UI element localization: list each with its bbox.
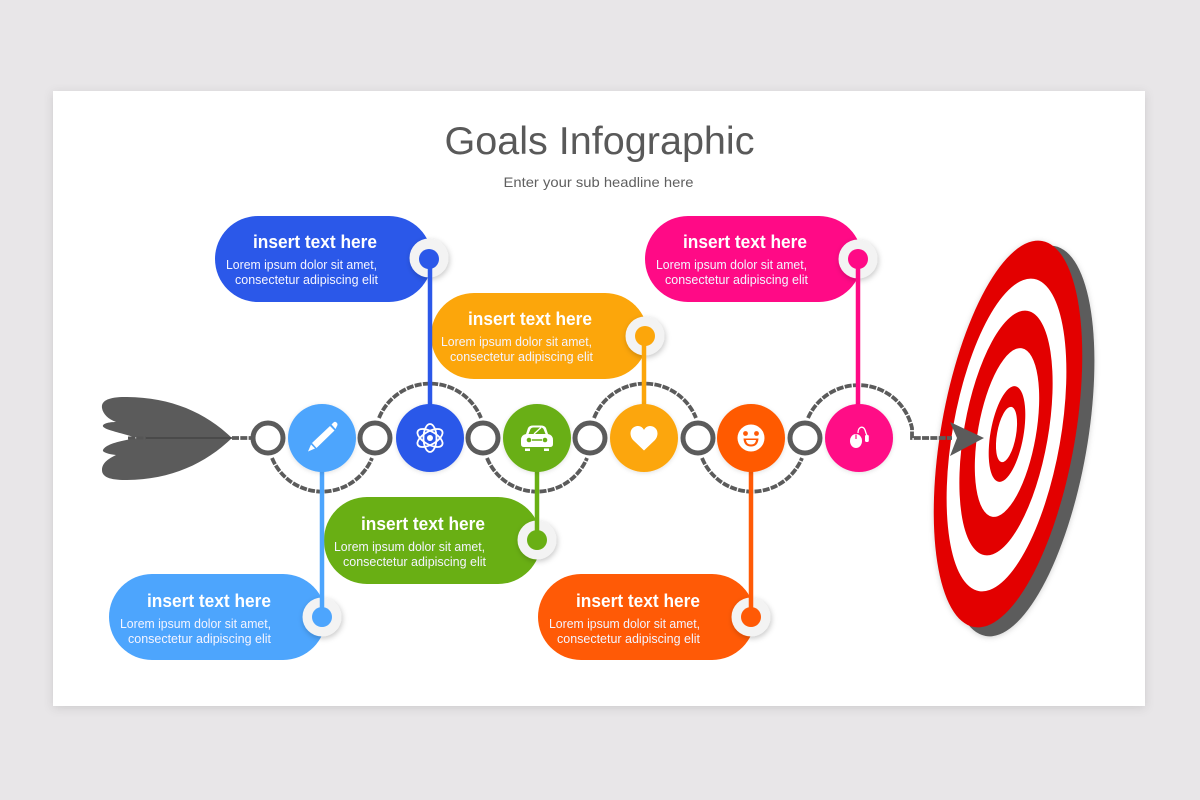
panel: magenta callout — [645, 216, 862, 302]
blue callout body: Lorem ipsum dolor sit amet, — [226, 258, 377, 272]
panel: blue callout: consectetur adipiscing elit — [235, 273, 379, 287]
orange callout heading: insert text here — [576, 591, 700, 611]
node: car step — [503, 404, 571, 560]
panel: green callout: consectetur adipiscing elit — [343, 555, 487, 569]
dashed path: curved arcs — [272, 384, 952, 492]
node: atom step — [396, 238, 464, 472]
panel: light blue callout: consectetur adipiscing elit — [128, 632, 272, 646]
icon: pencil — [308, 422, 338, 452]
orange callout body: Lorem ipsum dolor sit amet, — [549, 617, 700, 631]
magenta callout body: Lorem ipsum dolor sit amet, — [656, 258, 807, 272]
magenta callout heading: insert text here — [683, 232, 807, 252]
icon: dart feathers — [102, 397, 254, 480]
icon: car — [521, 426, 553, 451]
node: smile step — [717, 404, 785, 636]
light blue callout body: Lorem ipsum dolor sit amet, — [120, 617, 271, 631]
panel: amber callout — [431, 293, 648, 379]
icon: target board — [908, 229, 1120, 648]
panel: orange callout: consectetur adipiscing elit — [557, 632, 701, 646]
icon: smiling face — [738, 424, 764, 452]
panel: green callout — [324, 497, 541, 584]
icon: atom — [415, 424, 445, 452]
node: mouse step — [825, 240, 893, 472]
blue callout heading: insert text here — [253, 232, 377, 252]
panel: orange callout — [538, 574, 755, 660]
subtitle: Enter your sub headline here — [504, 174, 694, 190]
green callout body: Lorem ipsum dolor sit amet, — [334, 540, 485, 554]
connector rings — [253, 423, 820, 453]
icon: computer mouse — [850, 427, 869, 448]
amber callout heading: insert text here — [468, 309, 592, 329]
amber callout body: Lorem ipsum dolor sit amet, — [441, 335, 592, 349]
panel: blue callout — [215, 216, 432, 302]
light blue callout heading: insert text here — [147, 591, 271, 611]
node: heart step — [610, 316, 678, 472]
title: Goals Infographic — [444, 120, 754, 163]
node: pencil step — [288, 404, 356, 636]
green callout heading: insert text here — [361, 514, 485, 534]
panel: magenta callout: consectetur adipiscing elit — [665, 273, 809, 287]
panel: white slide card — [53, 91, 1145, 706]
icon: heart — [630, 426, 658, 450]
panel: light blue callout — [109, 574, 326, 660]
panel: amber callout: consectetur adipiscing elit — [450, 350, 594, 364]
arrow head — [950, 422, 984, 456]
